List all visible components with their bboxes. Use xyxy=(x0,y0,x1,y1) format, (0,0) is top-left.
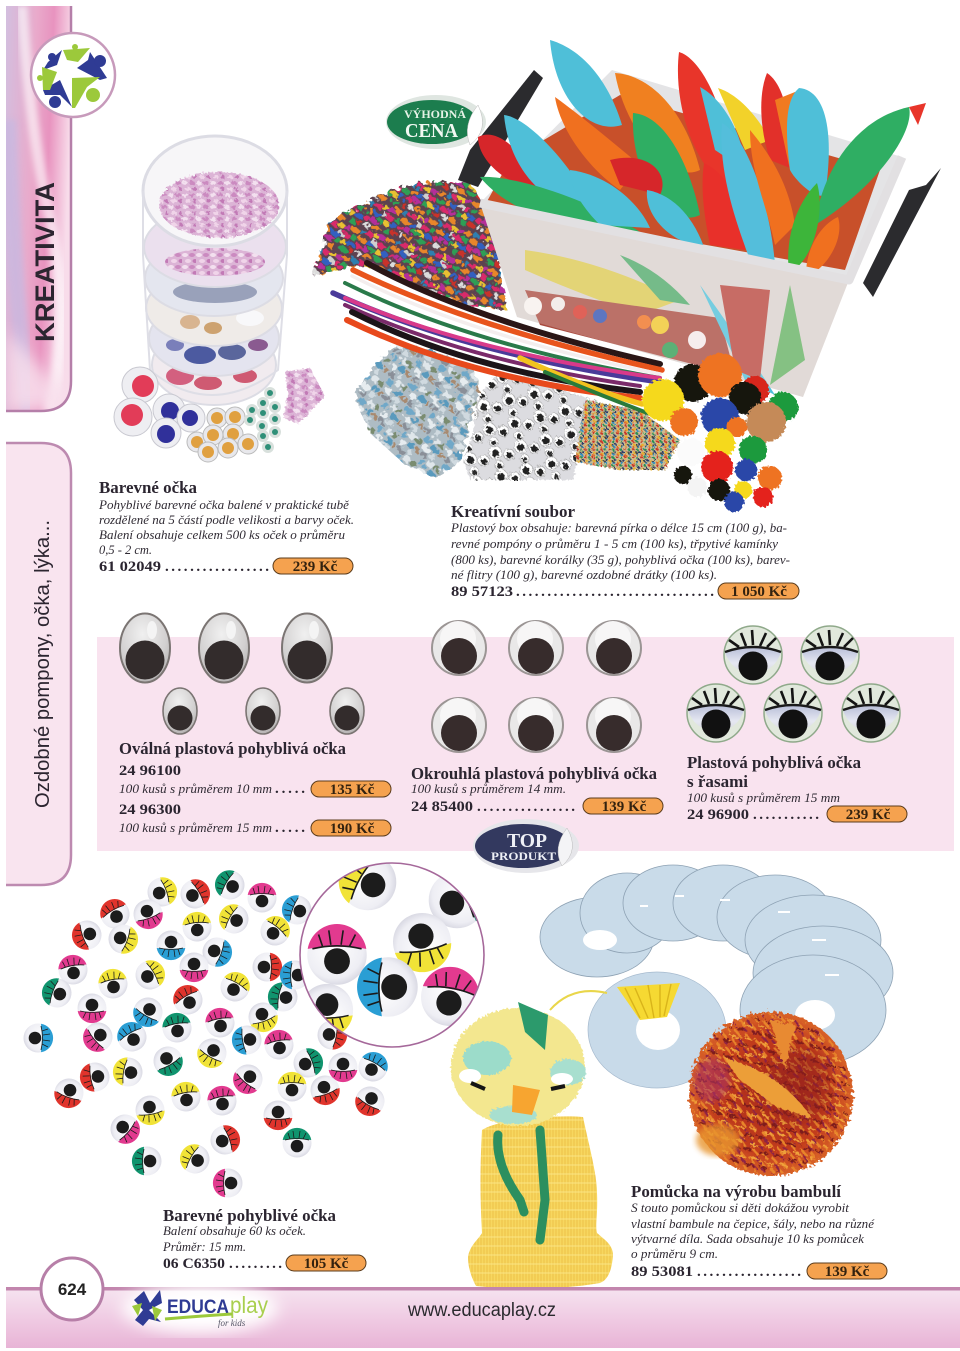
badge: top produkt: PRODUKT xyxy=(491,849,556,863)
text block: očka s řasami: ........... xyxy=(753,807,821,823)
text block: barevné očka: Barevné očka xyxy=(99,478,197,497)
product photo: stacked jar of eyes xyxy=(114,136,325,462)
panel: pink product band xyxy=(97,637,954,851)
text block: oválná očka: ..... xyxy=(275,820,308,836)
text block: kreatívní soubor: Plastový box obsahuje: barevná pírka o délce 15 cm (100 g), ba- xyxy=(450,520,787,535)
text block: barevné pohyblivé očka: 06 C6350 xyxy=(163,1256,225,1272)
text block: okrouhlá očka xyxy=(411,764,663,815)
text block: barevné pohyblivé očka: Průměr: 15 mm. xyxy=(162,1239,246,1254)
text block: očka s řasami: Plastová pohyblivá očka xyxy=(687,753,861,772)
text block: očka s řasami: 24 96900 xyxy=(687,807,749,823)
text block: oválná očka: ..... xyxy=(275,781,308,797)
heading: KREATIVITA: KREATIVITA xyxy=(30,182,60,342)
box clips xyxy=(458,70,941,297)
price pill xyxy=(807,1263,887,1280)
price pill: 190 Kč xyxy=(330,821,375,837)
text block: pomůcka na výrobu bambulí: vlastní bambule na čepice, šály, nebo na různé xyxy=(631,1216,875,1231)
icon: kreativita logo xyxy=(31,33,115,117)
magnified eyes circle xyxy=(299,862,485,1048)
text block: oválná očka: Oválná plastová pohyblivá očka xyxy=(119,739,346,758)
text block: pomůcka na výrobu bambulí: S touto pomůckou si děti dokážou vyrobit xyxy=(631,1200,849,1215)
text block: barevné očka: Pohyblivé barevné očka balené v praktické tubě xyxy=(98,497,349,512)
pompom maker discs photo xyxy=(540,865,893,1088)
price pill xyxy=(311,820,391,837)
chenille wires bundle xyxy=(333,263,662,414)
feather mass inside box xyxy=(485,95,880,270)
footer logo: play xyxy=(230,1292,268,1318)
red orange pompom xyxy=(689,1012,853,1176)
text block: kreatívní soubor xyxy=(450,502,799,600)
green scarf xyxy=(498,1130,545,1240)
round googly eyes xyxy=(432,621,641,752)
beads pile xyxy=(575,400,680,470)
text block: pomůcka na výrobu bambulí: o průměru 9 cm. xyxy=(631,1246,718,1261)
text block: pomůcka na výrobu bambulí: 89 53081 xyxy=(631,1264,693,1280)
page number badge: 624 xyxy=(58,1280,87,1299)
price pill: 135 Kč xyxy=(330,782,375,798)
loose eyes beside jar xyxy=(114,367,325,462)
price pill: 239 Kč xyxy=(846,807,891,823)
price pill: 139 Kč xyxy=(602,799,647,815)
badge: výhodná cena: CENA xyxy=(405,120,459,142)
text block: barevné očka: 0,5 - 2 cm. xyxy=(99,542,152,557)
lashed googly eyes xyxy=(687,626,900,742)
box back xyxy=(480,70,902,280)
footer website: www.educaplay.cz xyxy=(407,1300,556,1321)
text block: kreatívní soubor: né flitry (100 g), barevné ozdobné drátky (100 ks). xyxy=(451,567,717,582)
box front xyxy=(480,203,849,397)
price pill: 1 050 Kč xyxy=(731,584,787,600)
price pill xyxy=(273,558,353,575)
text block: pomůcka na výrobu bambulí: Pomůcka na výrobu bambulí xyxy=(631,1182,841,1201)
footer logo: EDUCA xyxy=(167,1297,229,1318)
product photo: creative set box, sequins, wires, pompoms xyxy=(313,40,941,512)
text block: oválná očka: 100 kusů s průměrem 10 mm xyxy=(119,781,272,796)
pompoms xyxy=(642,353,798,512)
text block: kreatívní soubor: (800 ks), barevné korálky (35 g), pohyblivá očka (100 ks), barev- xyxy=(451,552,790,567)
sequins pile xyxy=(313,182,507,310)
text block: barevné pohyblivé očka: Balení obsahuje 60 ks oček. xyxy=(163,1223,306,1238)
text block: kreatívní soubor: ................................ xyxy=(516,584,716,600)
rhinestones pile xyxy=(355,343,480,477)
text block: oválná očka: 100 kusů s průměrem 15 mm xyxy=(119,820,272,835)
text block: kreatívní soubor: Kreatívní soubor xyxy=(451,502,575,521)
text block: barevné očka: Balení obsahuje celkem 500 ks oček o průměru xyxy=(99,527,345,542)
badge: výhodná cena: VÝHODNÁ xyxy=(404,107,466,121)
badge: top produkt: TOP xyxy=(507,830,547,852)
text block: pomůcka na výrobu bambulí: výtvarné díla. Sada obsahuje 10 ks pomůcek xyxy=(631,1231,864,1246)
scattered coloured eyes photo xyxy=(24,865,393,1198)
knitted chick hat photo xyxy=(451,1002,613,1289)
heading: section name: Ozdobné pompony, očka, lýka... xyxy=(32,520,54,808)
text block: barevné pohyblivé očka: Barevné pohyblivé očka xyxy=(163,1206,336,1225)
text block: oválná očka: 24 96300 xyxy=(119,802,181,818)
text block: pomůcka na výrobu bambulí xyxy=(631,1182,887,1280)
text block: okrouhlá očka: 24 85400 xyxy=(411,799,473,815)
footer logo: for kids xyxy=(218,1318,246,1328)
text block: barevné pohyblivé očka: ......... xyxy=(229,1256,284,1272)
footer band xyxy=(6,1283,960,1348)
price pill xyxy=(583,798,663,815)
text block: kreatívní soubor: revné pompóny o průměru 1 - 5 cm (100 ks), třpytivé kamínky xyxy=(451,536,778,551)
text block: okrouhlá očka: ................ xyxy=(477,799,577,815)
feathers in box xyxy=(478,40,926,277)
price pill: 105 Kč xyxy=(304,1256,349,1272)
text block: očka s řasami: 100 kusů s průměrem 15 mm xyxy=(687,790,840,805)
text block: barevné očka: ................. xyxy=(165,559,271,575)
oval googly eyes xyxy=(120,614,364,734)
text block: očka s řasami xyxy=(687,753,907,823)
panel: kreativita tab xyxy=(6,6,71,411)
text block: pomůcka na výrobu bambulí: ................. xyxy=(697,1264,803,1280)
price pill xyxy=(718,583,799,600)
text block: barevné očka: rozdělené na 5 částí podle velikosti a barvy oček. xyxy=(99,512,354,527)
text block: oválná očka: 24 96100 xyxy=(119,763,181,779)
text block: oválná očka xyxy=(119,739,391,837)
yarn disc xyxy=(550,972,726,1088)
text block: očka s řasami: s řasami xyxy=(687,772,748,791)
text block: kreatívní soubor: 89 57123 xyxy=(451,584,513,600)
price pill xyxy=(311,781,391,798)
panel: section tab ozdobné pompony xyxy=(6,443,71,885)
price pill xyxy=(286,1255,366,1272)
footer logo xyxy=(122,1283,278,1333)
text block: barevné očka: 61 02049 xyxy=(99,559,161,575)
text block: okrouhlá očka: 100 kusů s průměrem 14 mm. xyxy=(411,781,566,796)
text block: barevné očka xyxy=(98,478,354,575)
page number badge xyxy=(41,1258,103,1320)
price pill: 239 Kč xyxy=(293,559,338,575)
text block: okrouhlá očka: Okrouhlá plastová pohyblivá očka xyxy=(411,764,657,783)
price pill xyxy=(827,806,907,823)
text block: barevné pohyblivé očka xyxy=(162,1206,366,1272)
price pill: 139 Kč xyxy=(825,1264,870,1280)
badge: výhodná cena xyxy=(386,95,486,149)
badge: top produkt xyxy=(473,819,579,873)
googly eyes pile xyxy=(463,373,597,480)
